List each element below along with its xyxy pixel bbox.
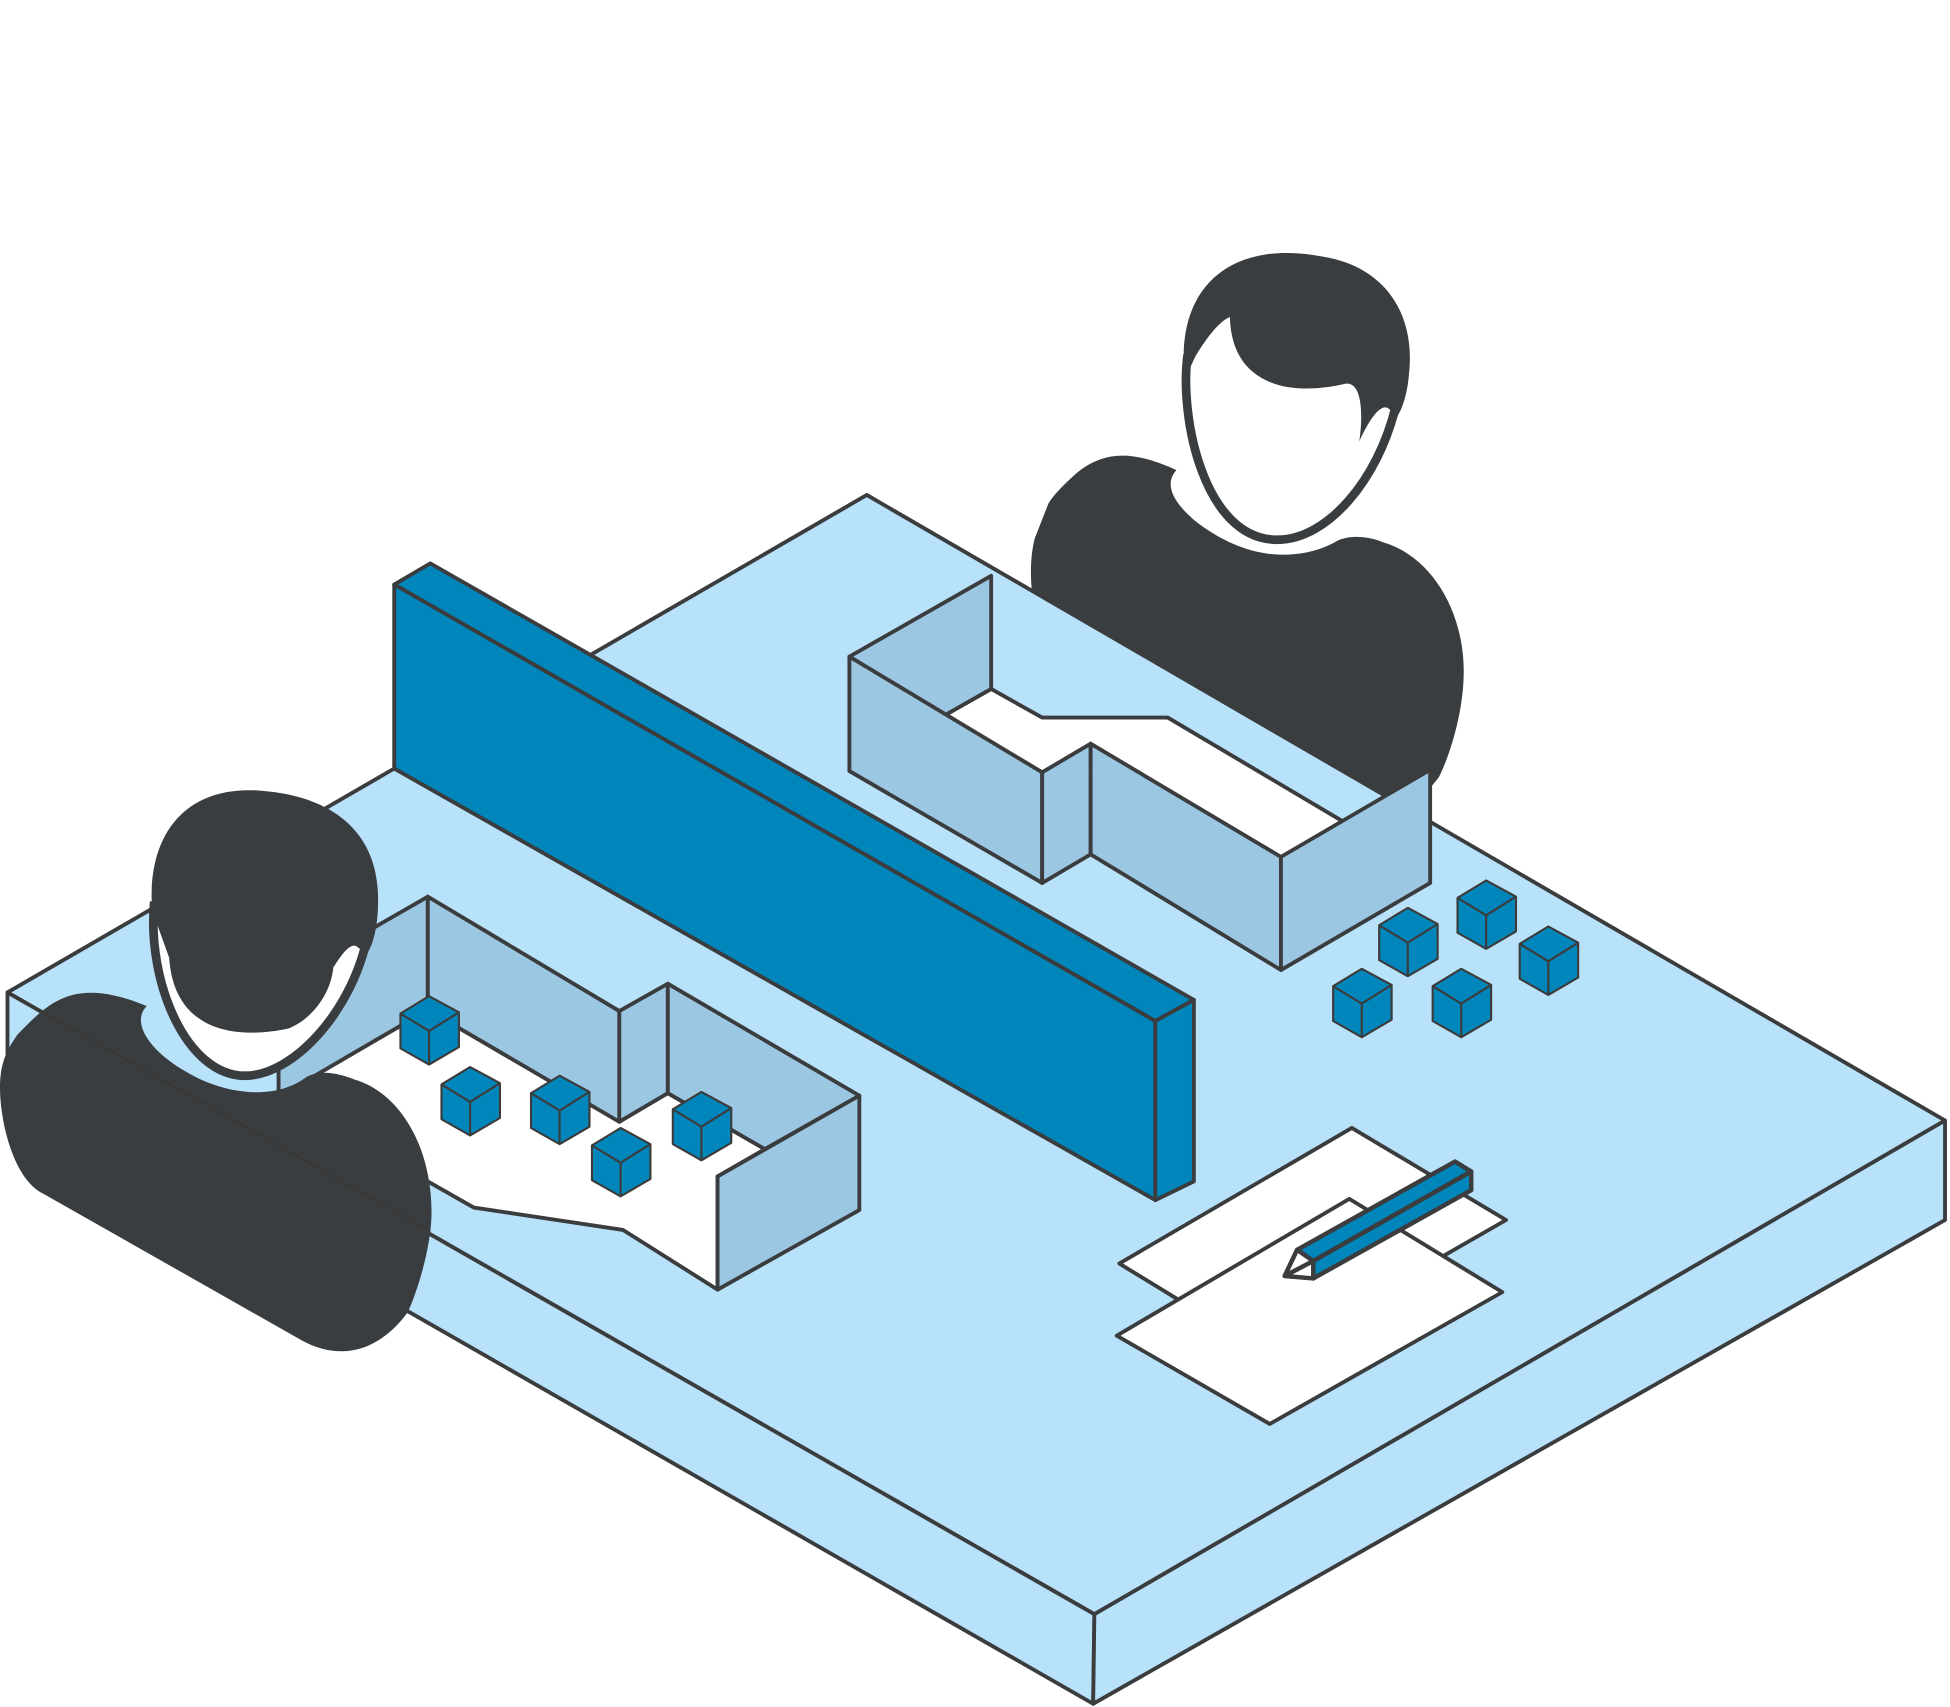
tray floor [945, 689, 1342, 871]
cube [400, 996, 459, 1065]
table right side [1093, 1121, 1945, 1704]
tray back wall [428, 897, 619, 1122]
cube [1333, 969, 1392, 1037]
front paper [1117, 1199, 1502, 1424]
body [0, 993, 432, 1351]
cubes: parts in tray [400, 996, 731, 1196]
tray far wall [668, 984, 859, 1149]
face outline [1186, 354, 1395, 540]
person: back worker [1031, 253, 1464, 821]
pencil tip [1285, 1250, 1313, 1278]
partition front [394, 585, 1155, 1200]
partition wall [394, 563, 1194, 1200]
cube [1379, 908, 1438, 976]
tray floor [279, 1010, 765, 1290]
tray front wall right [1091, 744, 1281, 970]
back paper [1119, 1128, 1506, 1356]
tray notch [1042, 744, 1091, 883]
partition end [1155, 1000, 1194, 1200]
cube [441, 1067, 500, 1135]
cube [1520, 927, 1578, 995]
tray left wall [279, 897, 428, 1097]
tray: back workstation [849, 576, 1430, 970]
hair [1184, 253, 1410, 441]
cube [1433, 969, 1491, 1037]
body [1031, 456, 1464, 821]
cubes: finished parts [1333, 880, 1578, 1037]
tray notch [619, 984, 668, 1122]
cube [531, 1076, 589, 1144]
pencil top face [1297, 1162, 1471, 1261]
table [7, 495, 1945, 1704]
pencil side face [1313, 1171, 1471, 1278]
tray back wall [849, 576, 991, 715]
table left side [7, 992, 1094, 1704]
cube [592, 1128, 650, 1196]
tray: front workstation [279, 897, 859, 1290]
tray front wall left [849, 657, 1042, 883]
face outline [153, 902, 367, 1076]
paper sheets and pencil [1117, 1128, 1506, 1424]
table top [7, 495, 1945, 1614]
partition top [394, 563, 1194, 1021]
tray end wall [1281, 770, 1430, 970]
table edge across body [7, 992, 430, 1231]
face fill [153, 871, 367, 1076]
hair [152, 790, 378, 1033]
pencil [1285, 1162, 1471, 1278]
tray end wall [718, 1096, 859, 1290]
face fill [1186, 286, 1395, 540]
person: front worker [0, 790, 432, 1351]
cube [1458, 880, 1516, 949]
cube [673, 1092, 731, 1160]
